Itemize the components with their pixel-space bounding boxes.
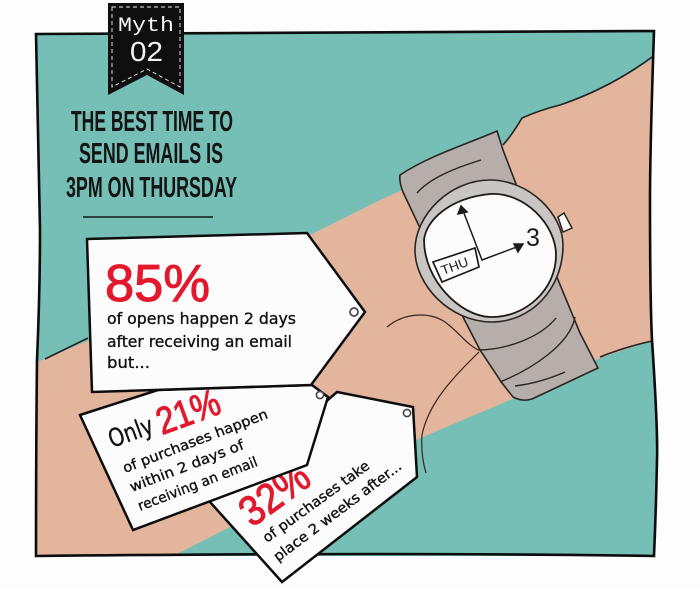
illustration: arm [30,54,660,560]
panel: tag 32% [210,392,417,582]
lower strap [463,275,598,400]
title: 3PM ON THURSDAY [66,172,237,204]
panel: tag 85% [87,233,365,392]
panel: tag 85%: of opens happen 2 days [107,309,296,328]
panel: tag 85%: 85% [105,255,210,313]
date box: THU [439,254,470,278]
panel: tag 85%: after receiving an email [107,332,292,351]
panel: tag 21%: receiving an email [136,454,260,515]
panel: tag 21%: 21% [151,382,226,443]
panel: teal frame background [36,31,657,556]
title: THE BEST TIME TO [71,106,233,138]
panel: tag 32%: 32% [230,453,319,535]
watch hands [458,206,523,260]
panel: tag 21%: within 2 days of [128,437,247,496]
watch case [415,180,563,322]
title [66,106,237,204]
panel: tag 21%: Only [104,411,157,454]
ribbon badge: Myth [118,15,174,38]
panel: tag 85%: but... [107,353,150,372]
panel: tag 21% [80,382,328,530]
crown [558,213,572,232]
icon: thin arm lines [387,315,479,473]
panel: tag 32%: of purchases take [260,458,373,546]
frame outline [36,31,657,556]
upper strap [400,131,516,228]
panel: tag 32%: place 2 weeks after... [271,459,405,565]
watch dial [424,194,556,317]
icon: wristwatch [400,131,598,400]
date box [433,248,479,282]
hour numeral: 3 [526,224,540,252]
title: SEND EMAILS IS [79,138,223,170]
ribbon badge: 02 [130,36,163,67]
panel: tag 21%: of purchases happen [121,407,270,477]
ribbon badge [108,3,184,95]
